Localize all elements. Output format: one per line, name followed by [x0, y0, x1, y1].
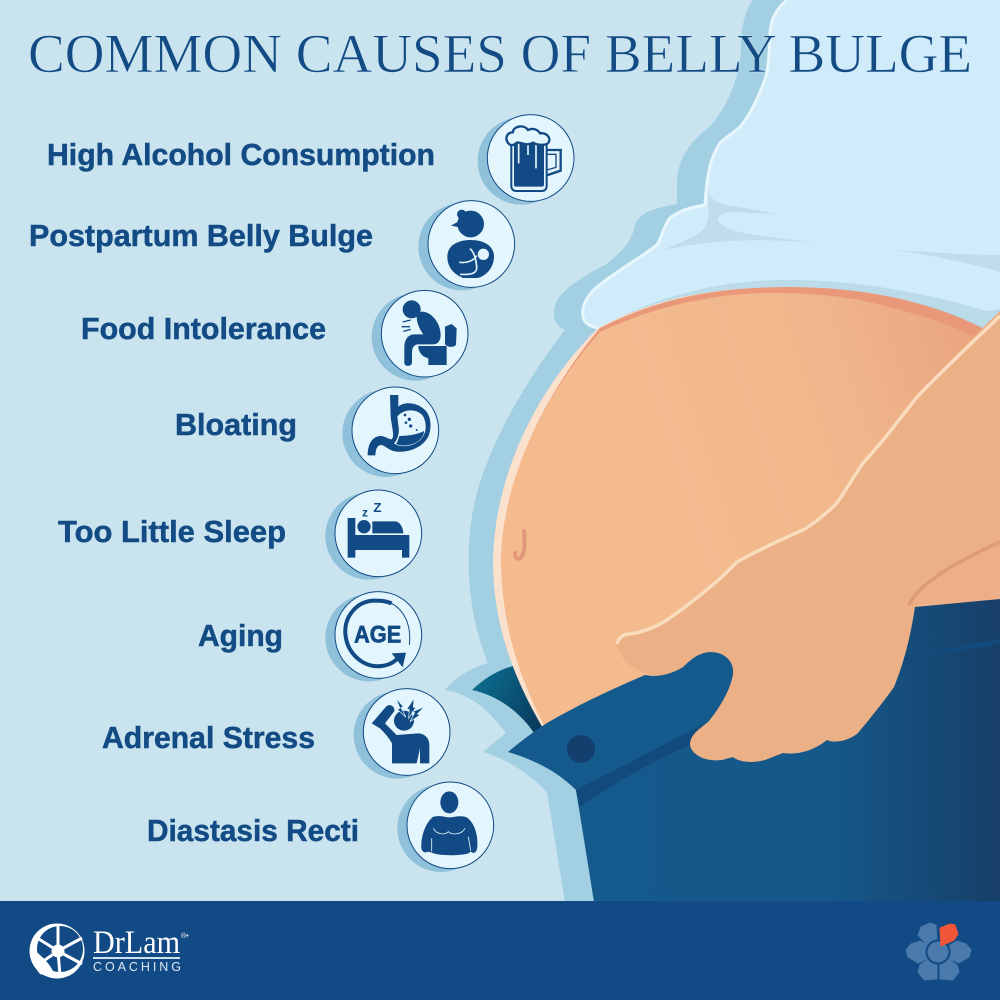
- shirt: [583, 0, 1000, 329]
- icon: beer mug: [478, 115, 574, 205]
- label: Adrenal Stress: Adrenal Stress: [102, 720, 315, 755]
- icon: stomach: [342, 387, 439, 477]
- arm and hand: [617, 311, 1000, 762]
- figure shadow band: [445, 0, 1000, 902]
- icon: age: [325, 592, 422, 681]
- label: High Alcohol Consumption: High Alcohol Consumption: [47, 137, 435, 172]
- label: Aging: Aging: [198, 618, 283, 653]
- button: [567, 735, 595, 763]
- icon: bed and sleep: [325, 490, 422, 580]
- wordmark: DrLam: [93, 925, 180, 961]
- label: Postpartum Belly Bulge: Postpartum Belly Bulge: [29, 218, 373, 253]
- navel: [515, 531, 525, 559]
- flower mark: [906, 923, 971, 980]
- label: Diastasis Recti: Diastasis Recti: [147, 813, 359, 848]
- shirt hem shadow: [598, 280, 1000, 329]
- footer bar: [0, 901, 1000, 1000]
- icon: body with belly: [397, 782, 494, 872]
- body illustration: [445, 0, 1000, 902]
- lower belly below crease: [910, 540, 1000, 605]
- jeans: [508, 599, 1000, 902]
- label: Bloating: Bloating: [175, 407, 297, 442]
- inner waistband: [472, 666, 550, 733]
- red petal: [940, 924, 958, 946]
- title: COMMON CAUSES OF BELLY BULGE: [28, 23, 972, 84]
- registered mark: ®•: [181, 932, 189, 940]
- belly: [493, 287, 1000, 740]
- icon: bed and sleep: Z: [373, 500, 381, 515]
- icon: stressed person: [354, 689, 450, 779]
- icon: bed and sleep: z: [362, 506, 368, 520]
- icon: person on toilet: [372, 290, 468, 381]
- shirt outline: [583, 0, 787, 328]
- label: Food Intolerance: Food Intolerance: [81, 311, 326, 346]
- DrLam Coaching logo: [30, 924, 189, 978]
- waistband flap: [508, 652, 733, 790]
- label: Too Little Sleep: Too Little Sleep: [58, 514, 286, 549]
- logo mark: [30, 924, 84, 978]
- icon: mother and baby: [418, 201, 515, 290]
- crease line: [909, 542, 1000, 605]
- waistband stitch shadow: [576, 639, 1000, 807]
- arm highlight: [617, 316, 1000, 644]
- icon: age: AGE: [354, 622, 401, 649]
- coaching text: COACHING: [93, 960, 181, 974]
- shirt folds: [664, 190, 1000, 272]
